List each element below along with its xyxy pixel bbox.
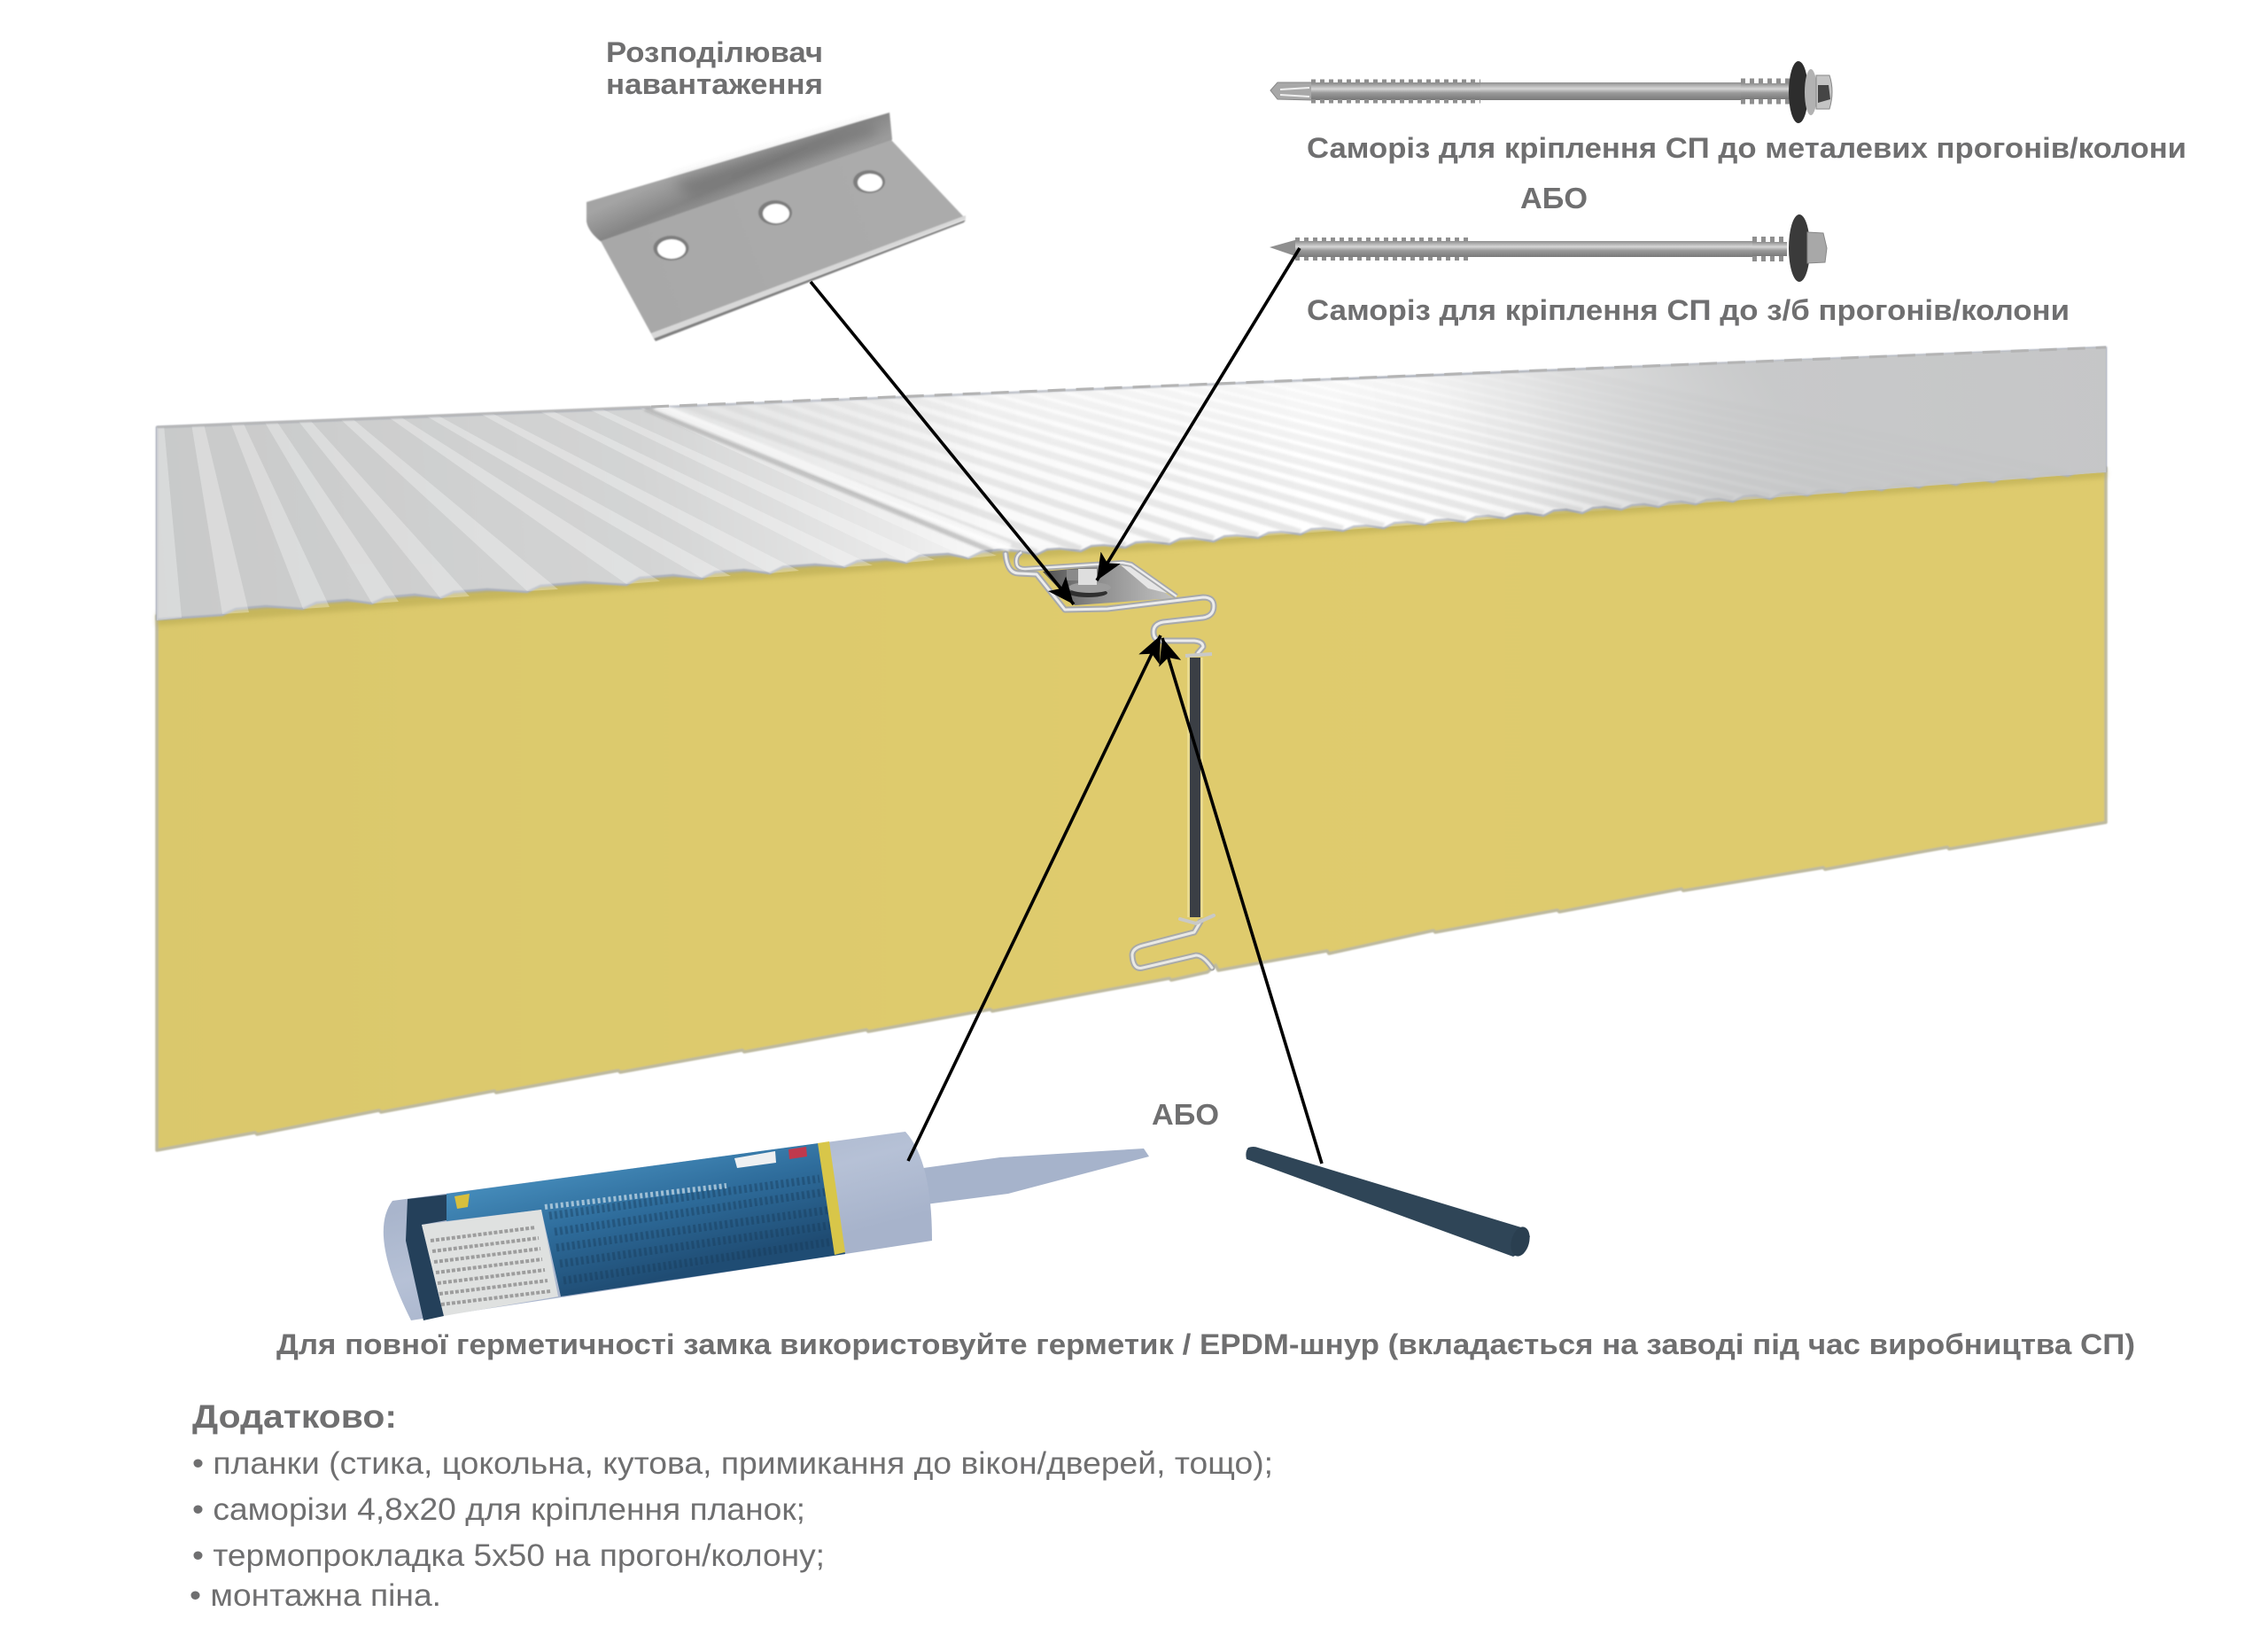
icon: sealant cartridge bbox=[384, 1132, 1149, 1320]
text block: additional items bbox=[190, 1398, 1273, 1613]
cartridge nozzle bbox=[917, 1149, 1149, 1204]
icon: self-tapping screw for metal bbox=[1270, 61, 1832, 123]
icon: EPDM cord bbox=[1246, 1147, 1533, 1258]
heading: additional: Додатково: bbox=[192, 1398, 397, 1435]
cartridge label bbox=[406, 1141, 845, 1320]
right sheet ribs bbox=[687, 397, 1720, 554]
heading: load distributor bbox=[606, 36, 823, 100]
list item: screws: • саморізи 4,8х20 для кріплення планок; bbox=[192, 1492, 805, 1527]
icon: self-tapping screw for concrete bbox=[1270, 214, 1827, 282]
label: or: АБО bbox=[1520, 182, 1588, 214]
lower joint lock detail bbox=[1132, 915, 1214, 968]
label: screw for metal: Саморіз для кріплення СП до металевих прогонів/колони bbox=[1307, 132, 2186, 164]
icon: load distributor plate bbox=[586, 113, 966, 341]
list item: trims: • планки (стика, цокольна, кутова, примикання до вікон/дверей, тощо); bbox=[192, 1446, 1273, 1481]
panel: sandwich panel bbox=[152, 297, 2106, 1150]
EPDM cord inside joint bbox=[1187, 658, 1203, 917]
arrow: cord to joint bbox=[1162, 638, 1322, 1164]
left sheet ribs bbox=[152, 406, 997, 620]
cartridge body bbox=[384, 1132, 932, 1320]
list item: thermal gasket: • термопрокладка 5х50 на прогон/колону; bbox=[192, 1538, 825, 1573]
heading: load distributor: навантаження bbox=[606, 68, 823, 100]
arrow: plate to joint bbox=[811, 282, 1074, 604]
white area right of seam bbox=[651, 372, 1506, 549]
panel top sheet bbox=[153, 346, 2109, 627]
label: or (sealant or cord): АБО bbox=[1152, 1098, 1219, 1131]
label: screw for concrete: Саморіз для кріплення СП до з/б прогонів/колони bbox=[1307, 294, 2070, 326]
arrow: sealant to joint bbox=[908, 635, 1161, 1161]
heading: load distributor: Розподілювач bbox=[606, 36, 823, 68]
list item: foam: • монтажна піна. bbox=[190, 1578, 441, 1613]
panel foam core bbox=[157, 468, 2106, 1150]
arrow: screw to joint bbox=[1097, 248, 1300, 580]
panel longitudinal seam bbox=[645, 406, 1010, 551]
caption: joint sealing note: Для повної герметичності замка використовуйте герметик / EPDM-шнур (вкладається на заводі під час виробництва СП) bbox=[276, 1328, 2135, 1360]
upper joint lock detail bbox=[1006, 552, 1214, 656]
